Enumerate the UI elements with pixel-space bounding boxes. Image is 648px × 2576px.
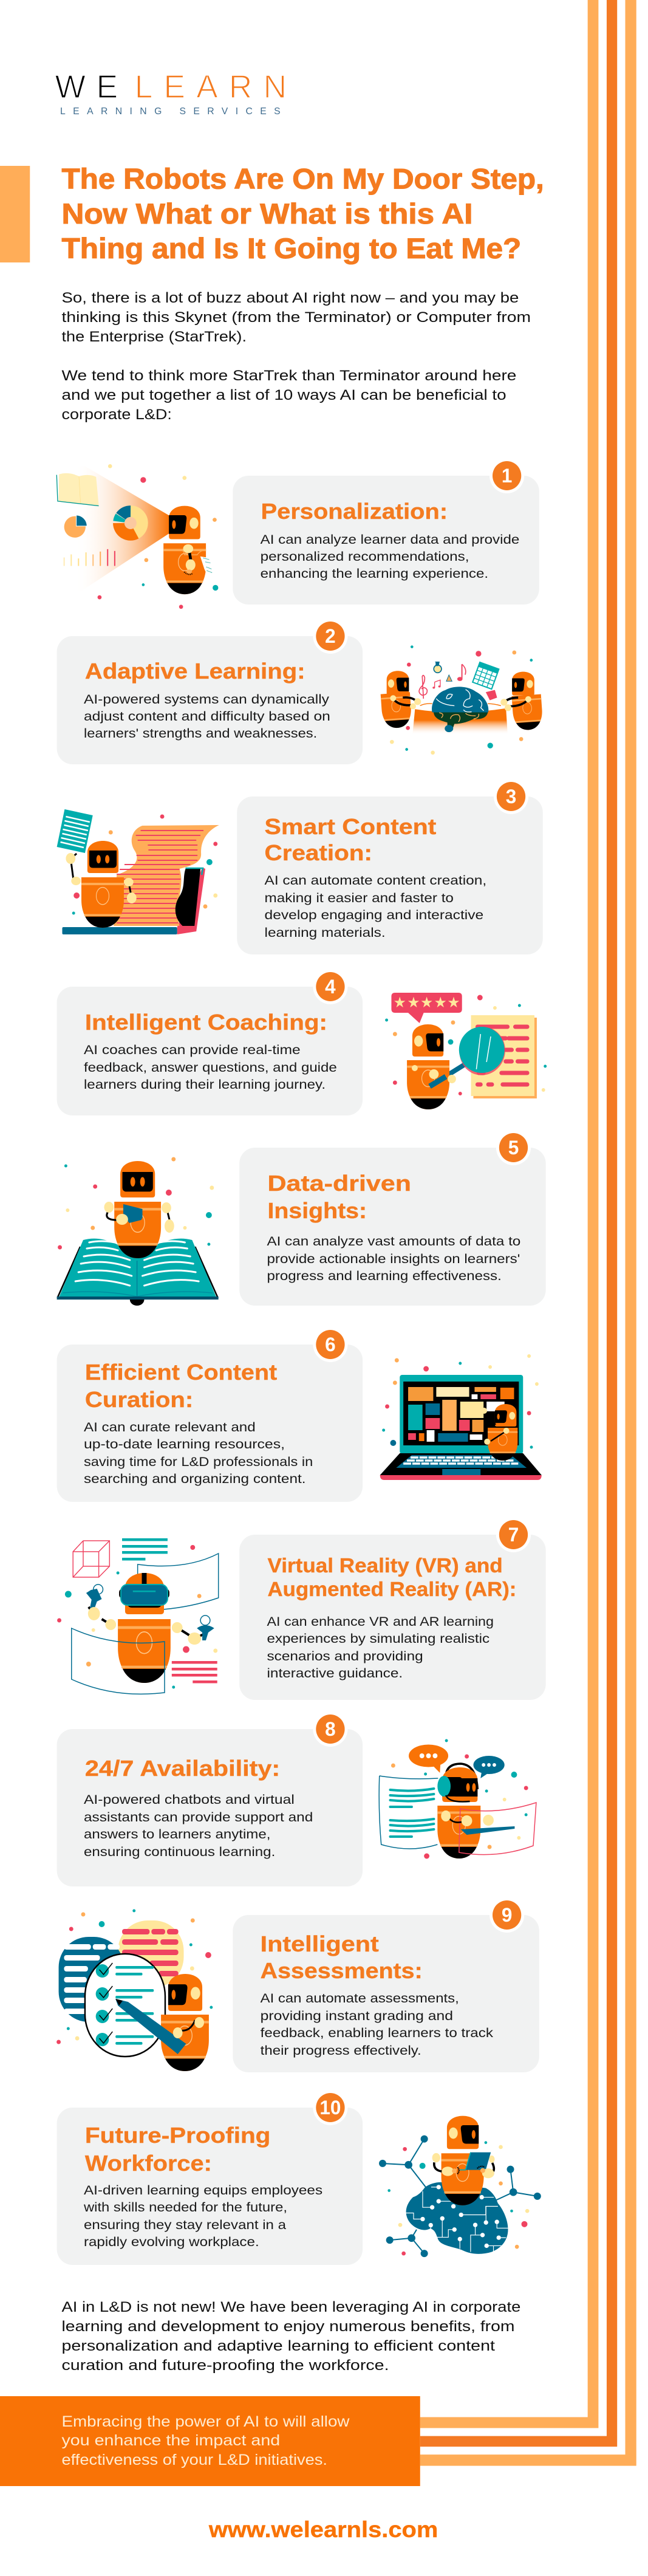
intro text: So, there is a lot of buzz about AI right now – and you may be	[61, 290, 519, 306]
heading 2: Adaptive Learning:	[85, 659, 305, 683]
body 2: AI-powered systems can dynamically	[84, 693, 330, 707]
badge 9: 9	[502, 1904, 512, 1926]
body 4	[84, 1043, 337, 1092]
callout	[0, 2396, 420, 2486]
body 10: with skills needed for the future,	[83, 2201, 287, 2215]
icon: robot reading on open book	[57, 1157, 219, 1306]
heading 7	[267, 1554, 516, 1600]
body 10: ensuring they stay relevant in a	[84, 2218, 286, 2232]
heading 5: Insights:	[267, 1199, 367, 1223]
body 9: AI can automate assessments,	[261, 1992, 459, 2006]
badge 2	[313, 618, 348, 654]
heading 7: Virtual Reality (VR) and	[267, 1554, 503, 1577]
heading 10: Workforce:	[85, 2151, 212, 2176]
body 10: rapidly evolving workplace.	[84, 2235, 259, 2249]
body 7	[267, 1615, 494, 1680]
body 7: scenarios and providing	[267, 1649, 423, 1663]
callout: you enhance the impact and	[61, 2433, 280, 2449]
body 7: AI can enhance VR and AR learning	[267, 1615, 494, 1629]
body 9: feedback, enabling learners to track	[261, 2026, 494, 2040]
body 2: learners' strengths and weaknesses.	[84, 727, 317, 741]
body 3: AI can automate content creation,	[265, 874, 486, 888]
body 2: adjust content and difficulty based on	[84, 710, 330, 724]
body 7: experiences by simulating realistic	[267, 1632, 489, 1646]
heading 10: Future-Proofing	[85, 2123, 270, 2148]
panel: 9 intelligent assessments	[233, 1897, 539, 2072]
panel: 4 intelligent coaching	[57, 969, 363, 1115]
body 6: saving time for L&D professionals in	[84, 1455, 313, 1469]
left accent block	[0, 166, 30, 262]
panel: 8 24/7 availability	[57, 1711, 363, 1886]
body 5: progress and learning effectiveness.	[267, 1269, 502, 1283]
badge 10: 10	[319, 2097, 341, 2119]
icon: robots with brain	[381, 645, 544, 755]
heading 10	[85, 2123, 270, 2176]
heading 5	[267, 1171, 411, 1223]
badge 7	[496, 1517, 531, 1552]
body 6: searching and organizing content.	[84, 1472, 306, 1486]
heading 9	[261, 1932, 423, 1983]
body 4: learners during their learning journey.	[84, 1078, 326, 1092]
panel: 5 data-driven insights	[239, 1130, 546, 1306]
heading 3: Creation:	[265, 841, 372, 865]
body 1: enhancing the learning experience.	[261, 567, 488, 581]
heading 6	[85, 1360, 277, 1412]
badge 8: 8	[325, 1718, 336, 1740]
icon: robot with VR headset	[57, 1538, 219, 1694]
logo	[55, 69, 287, 117]
panel: 10 future-proofing workforce	[57, 2090, 363, 2265]
icon: robot on circuit brain	[379, 2116, 541, 2257]
logo: LEARN	[135, 69, 287, 105]
body 3	[265, 874, 486, 940]
intro text	[61, 290, 531, 423]
panel: 3 smart content creation	[237, 779, 543, 954]
body 10: AI-driven learning equips employees	[84, 2184, 322, 2197]
panel: 6 efficient content curation	[57, 1327, 363, 1502]
badge 8	[313, 1711, 348, 1747]
badge 9	[489, 1897, 524, 1933]
body 3: making it easier and faster to	[265, 891, 454, 905]
heading 3: Smart Content	[265, 815, 436, 839]
heading 5: Data-driven	[267, 1171, 411, 1196]
main title: Now What or What is this AI	[61, 198, 472, 230]
panel: 1 personalization	[233, 458, 539, 605]
body 5	[267, 1235, 520, 1283]
icon: robot with magnifier and ratings: ★	[394, 995, 406, 1011]
body 8: assistants can provide support and	[84, 1810, 313, 1824]
heading 7: Augmented Reality (AR):	[267, 1578, 516, 1600]
panel: 2 adaptive learning	[57, 618, 363, 764]
closing paragraph: learning and development to enjoy numerous benefits, from	[61, 2318, 514, 2335]
icon: robot projecting charts	[56, 464, 218, 609]
closing paragraph	[61, 2299, 520, 2374]
badge 2: 2	[325, 625, 336, 647]
icon: laptop with content tiles	[380, 1354, 542, 1480]
icon: robot writing scroll	[57, 809, 219, 934]
main title: The Robots Are On My Door Step,	[61, 163, 544, 195]
badge 4: 4	[325, 976, 336, 998]
body 3: learning materials.	[265, 926, 386, 940]
body 7: interactive guidance.	[267, 1667, 403, 1680]
icon: robot with magnifier and ratings: ★	[407, 995, 420, 1011]
body 6: AI can curate relevant and	[84, 1420, 256, 1434]
heading 6: Efficient Content	[85, 1360, 277, 1385]
decorative stripes frame	[420, 0, 631, 2460]
body 8	[84, 1793, 313, 1859]
main title	[61, 163, 544, 264]
badge 5	[496, 1130, 531, 1165]
body 2	[84, 693, 330, 741]
closing paragraph: AI in L&D is not new! We have been leveraging AI in corporate	[61, 2299, 520, 2315]
body 9: their progress effectively.	[261, 2044, 421, 2058]
icon: robot with magnifier and ratings: ★	[420, 995, 433, 1011]
badge 3: 3	[506, 786, 516, 807]
body 1: personalized recommendations,	[261, 550, 469, 564]
body 8: ensuring continuous learning.	[84, 1845, 275, 1859]
intro text: and we put together a list of 10 ways AI can be beneficial to	[61, 387, 506, 403]
heading 8: 24/7 Availability:	[85, 1756, 280, 1781]
intro text: We tend to think more StarTrek than Terminator around here	[61, 368, 516, 384]
body 4: AI coaches can provide real-time	[84, 1043, 301, 1057]
heading 3	[265, 815, 436, 865]
body 8: AI-powered chatbots and virtual	[84, 1793, 295, 1807]
closing paragraph: curation and future-proofing the workforce.	[61, 2357, 389, 2374]
badge 7: 7	[508, 1524, 519, 1546]
body 5: AI can analyze vast amounts of data to	[267, 1235, 520, 1249]
website url: www.welearnls.com	[208, 2517, 438, 2542]
intro text: thinking is this Skynet (from the Terminator) or Computer from	[61, 309, 531, 326]
logo: LEARNING SERVICES	[60, 106, 281, 117]
badge 6	[313, 1327, 348, 1362]
intro text: the Enterprise (StarTrek).	[61, 329, 247, 345]
body 4: feedback, answer questions, and guide	[84, 1061, 337, 1075]
icon: robot with magnifier and ratings: ★	[434, 995, 447, 1011]
panel: 7 VR and AR	[239, 1517, 546, 1700]
badge 4	[313, 969, 348, 1004]
body 1: AI can analyze learner data and provide	[261, 533, 519, 547]
icon: robot chatbot with panels	[379, 1739, 536, 1859]
badge 10	[313, 2090, 348, 2125]
callout: effectiveness of your L&D initiatives.	[61, 2452, 327, 2468]
heading 1: Personalization:	[261, 499, 448, 524]
heading 9: Intelligent	[261, 1932, 379, 1956]
badge 5: 5	[508, 1137, 519, 1159]
logo: WE	[55, 69, 118, 105]
main title: Thing and Is It Going to Eat Me?	[61, 233, 521, 264]
callout: Embracing the power of AI to will allow	[61, 2414, 350, 2430]
heading 6: Curation:	[85, 1388, 193, 1412]
heading 9: Assessments:	[261, 1959, 423, 1983]
badge 3	[494, 779, 528, 814]
icon: robot with magnifier and ratings	[385, 993, 547, 1109]
badge 6: 6	[325, 1334, 336, 1355]
body 1	[261, 533, 519, 581]
heading 4: Intelligent Coaching:	[85, 1010, 327, 1035]
body 10	[83, 2184, 322, 2249]
intro text: corporate L&D:	[61, 406, 172, 423]
icon: robot grading checklist	[56, 1909, 213, 2071]
body 6: up-to-date learning resources,	[84, 1437, 285, 1451]
badge 1: 1	[502, 465, 512, 487]
icon: robot with magnifier and ratings: ★	[447, 995, 460, 1011]
body 3: develop engaging and interactive	[265, 908, 483, 922]
body 9	[261, 1992, 494, 2058]
closing paragraph: personalization and adaptive learning to efficient content	[61, 2338, 495, 2354]
body 5: provide actionable insights on learners'	[267, 1252, 520, 1266]
body 6	[84, 1420, 313, 1486]
badge 1	[489, 458, 524, 493]
body 9: providing instant grading and	[261, 2009, 453, 2023]
body 8: answers to learners anytime,	[84, 1828, 270, 1841]
